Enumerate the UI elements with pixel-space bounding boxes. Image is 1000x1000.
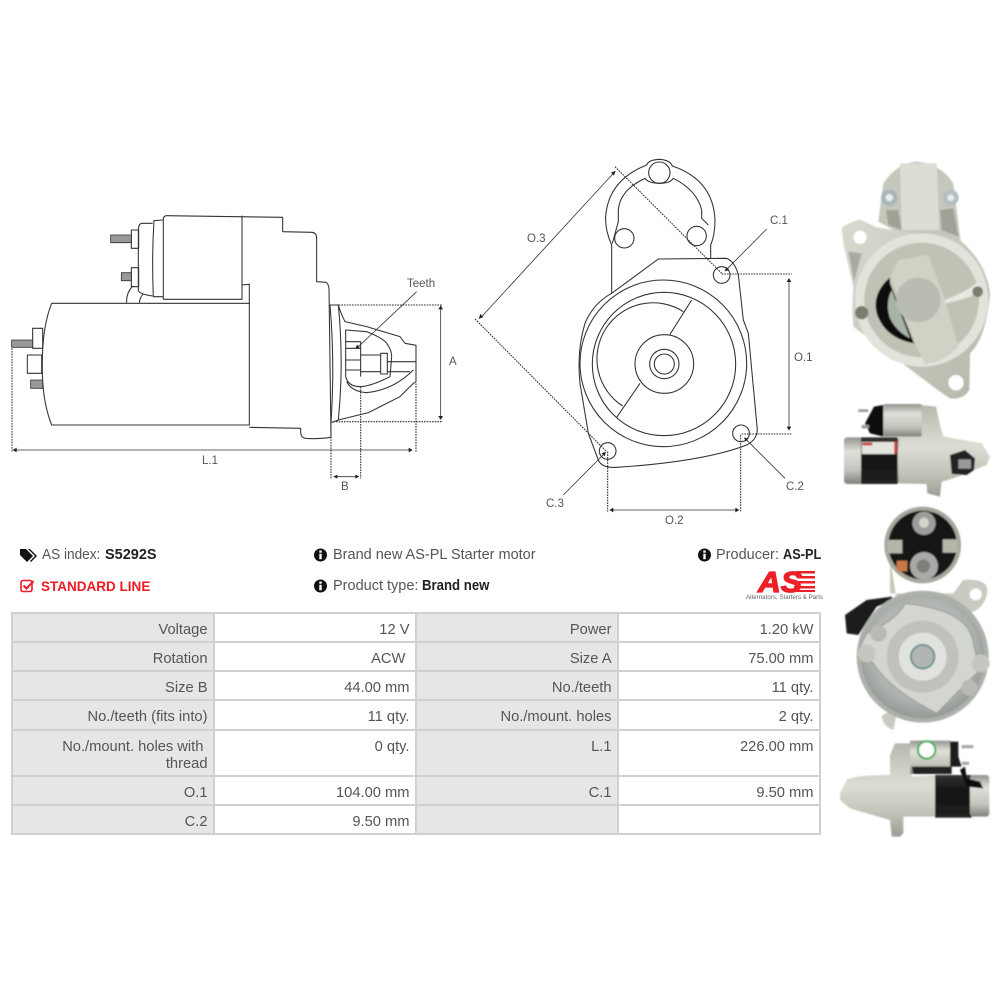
row: O.1: 104.00 mm — [336, 785, 410, 801]
row: Voltage — [13, 614, 819, 641]
AS index text: S5292S — [105, 547, 157, 563]
mounting holes — [599, 267, 749, 459]
front view technical drawing — [474, 158, 792, 512]
product type text: Brand new — [422, 578, 490, 594]
row: Size B: Size B — [165, 680, 208, 696]
row: Rotation — [13, 643, 819, 670]
photo: starter front view — [842, 162, 990, 399]
row: Voltage: 12 V — [379, 622, 410, 638]
label: L.1: L.1 — [202, 455, 218, 467]
label: B: B — [341, 481, 349, 493]
row: Voltage: Power — [570, 622, 612, 638]
row: mount holes with thread: thread — [166, 756, 208, 772]
product type line — [314, 578, 490, 594]
solenoid and drive housing — [127, 216, 331, 439]
dimension lines — [12, 305, 442, 478]
product photos column — [840, 161, 991, 838]
icon: info — [314, 548, 327, 562]
specification table — [11, 612, 821, 835]
producer text: AS-PL — [783, 547, 821, 563]
label: O.3: O.3 — [527, 233, 546, 245]
row: Voltage: 1.20 kW — [760, 622, 814, 638]
row: Size B: No./teeth — [552, 680, 612, 696]
icon: tags — [20, 549, 37, 562]
side view technical drawing — [11, 215, 443, 479]
icon: info — [698, 548, 711, 562]
concentric nose circles — [580, 280, 747, 447]
logo mark — [756, 568, 815, 594]
row: C.2: C.2 — [185, 814, 208, 830]
label: Teeth: Teeth — [407, 278, 435, 290]
label: O.1: O.1 — [794, 352, 813, 364]
row: C.2: 9.50 mm — [352, 814, 410, 830]
motor body — [42, 303, 249, 425]
row: mount holes with thread: 226.00 mm — [740, 739, 814, 755]
photo: starter rear view — [845, 507, 990, 730]
icon: checked box — [20, 580, 34, 592]
row: O.1: 9.50 mm — [756, 785, 814, 801]
row: Size B — [13, 672, 819, 699]
AS index text: AS index: — [42, 547, 100, 563]
label: O.2: O.2 — [665, 515, 684, 527]
icon: info — [314, 580, 327, 592]
row: No./teeth fits into: No./teeth (fits into) — [88, 709, 208, 725]
row: Voltage: Voltage — [158, 622, 208, 638]
standard line badge — [20, 578, 150, 594]
pinion nose — [330, 305, 416, 423]
row: Size B: 44.00 mm — [344, 680, 410, 696]
dimension lines — [475, 167, 792, 512]
row: mount holes with thread: L.1 — [591, 739, 612, 755]
label: C.2: C.2 — [786, 481, 804, 493]
row: C.2 — [13, 806, 819, 833]
AS index text — [42, 547, 157, 563]
row: mount holes with thread: No./mount. holes with — [62, 739, 203, 755]
row: Rotation: ACW — [371, 651, 405, 667]
row: No./teeth fits into: 2 qty. — [779, 709, 814, 725]
solenoid terminals — [27, 230, 139, 373]
label: A: A — [449, 356, 457, 368]
photo: starter opposite side view — [840, 741, 989, 837]
mounting flange — [579, 258, 757, 467]
row: No./teeth fits into — [13, 701, 819, 729]
row: O.1 — [13, 777, 819, 804]
row: mount holes with thread: 0 qty. — [375, 739, 410, 755]
row: Rotation: 75.00 mm — [748, 651, 814, 667]
logo tagline: Alternators, Starters & Parts — [746, 594, 823, 601]
row: mount holes with thread — [13, 731, 819, 775]
producer text — [716, 547, 821, 563]
row: No./teeth fits into: No./mount. holes — [500, 709, 612, 725]
producer line — [698, 547, 821, 563]
row: O.1: C.1 — [589, 785, 612, 801]
label: C.3: C.3 — [546, 498, 564, 510]
product description line — [314, 547, 536, 563]
photo: starter side view — [844, 404, 990, 497]
product type text — [333, 578, 490, 594]
AS index line — [20, 547, 157, 563]
row: Rotation: Rotation — [153, 651, 208, 667]
product type text: Product type: — [333, 578, 418, 594]
producer text: Producer: — [716, 547, 779, 563]
rear lobe — [606, 159, 715, 293]
description text: Brand new AS-PL Starter motor — [333, 547, 536, 563]
standard line text: STANDARD LINE — [41, 578, 150, 594]
AS-PL logo — [746, 568, 823, 601]
row: Size B: 11 qty. — [772, 680, 814, 696]
row: Rotation: Size A — [570, 651, 612, 667]
row: No./teeth fits into: 11 qty. — [368, 709, 410, 725]
row: O.1: O.1 — [184, 785, 208, 801]
label: C.1: C.1 — [770, 215, 788, 227]
